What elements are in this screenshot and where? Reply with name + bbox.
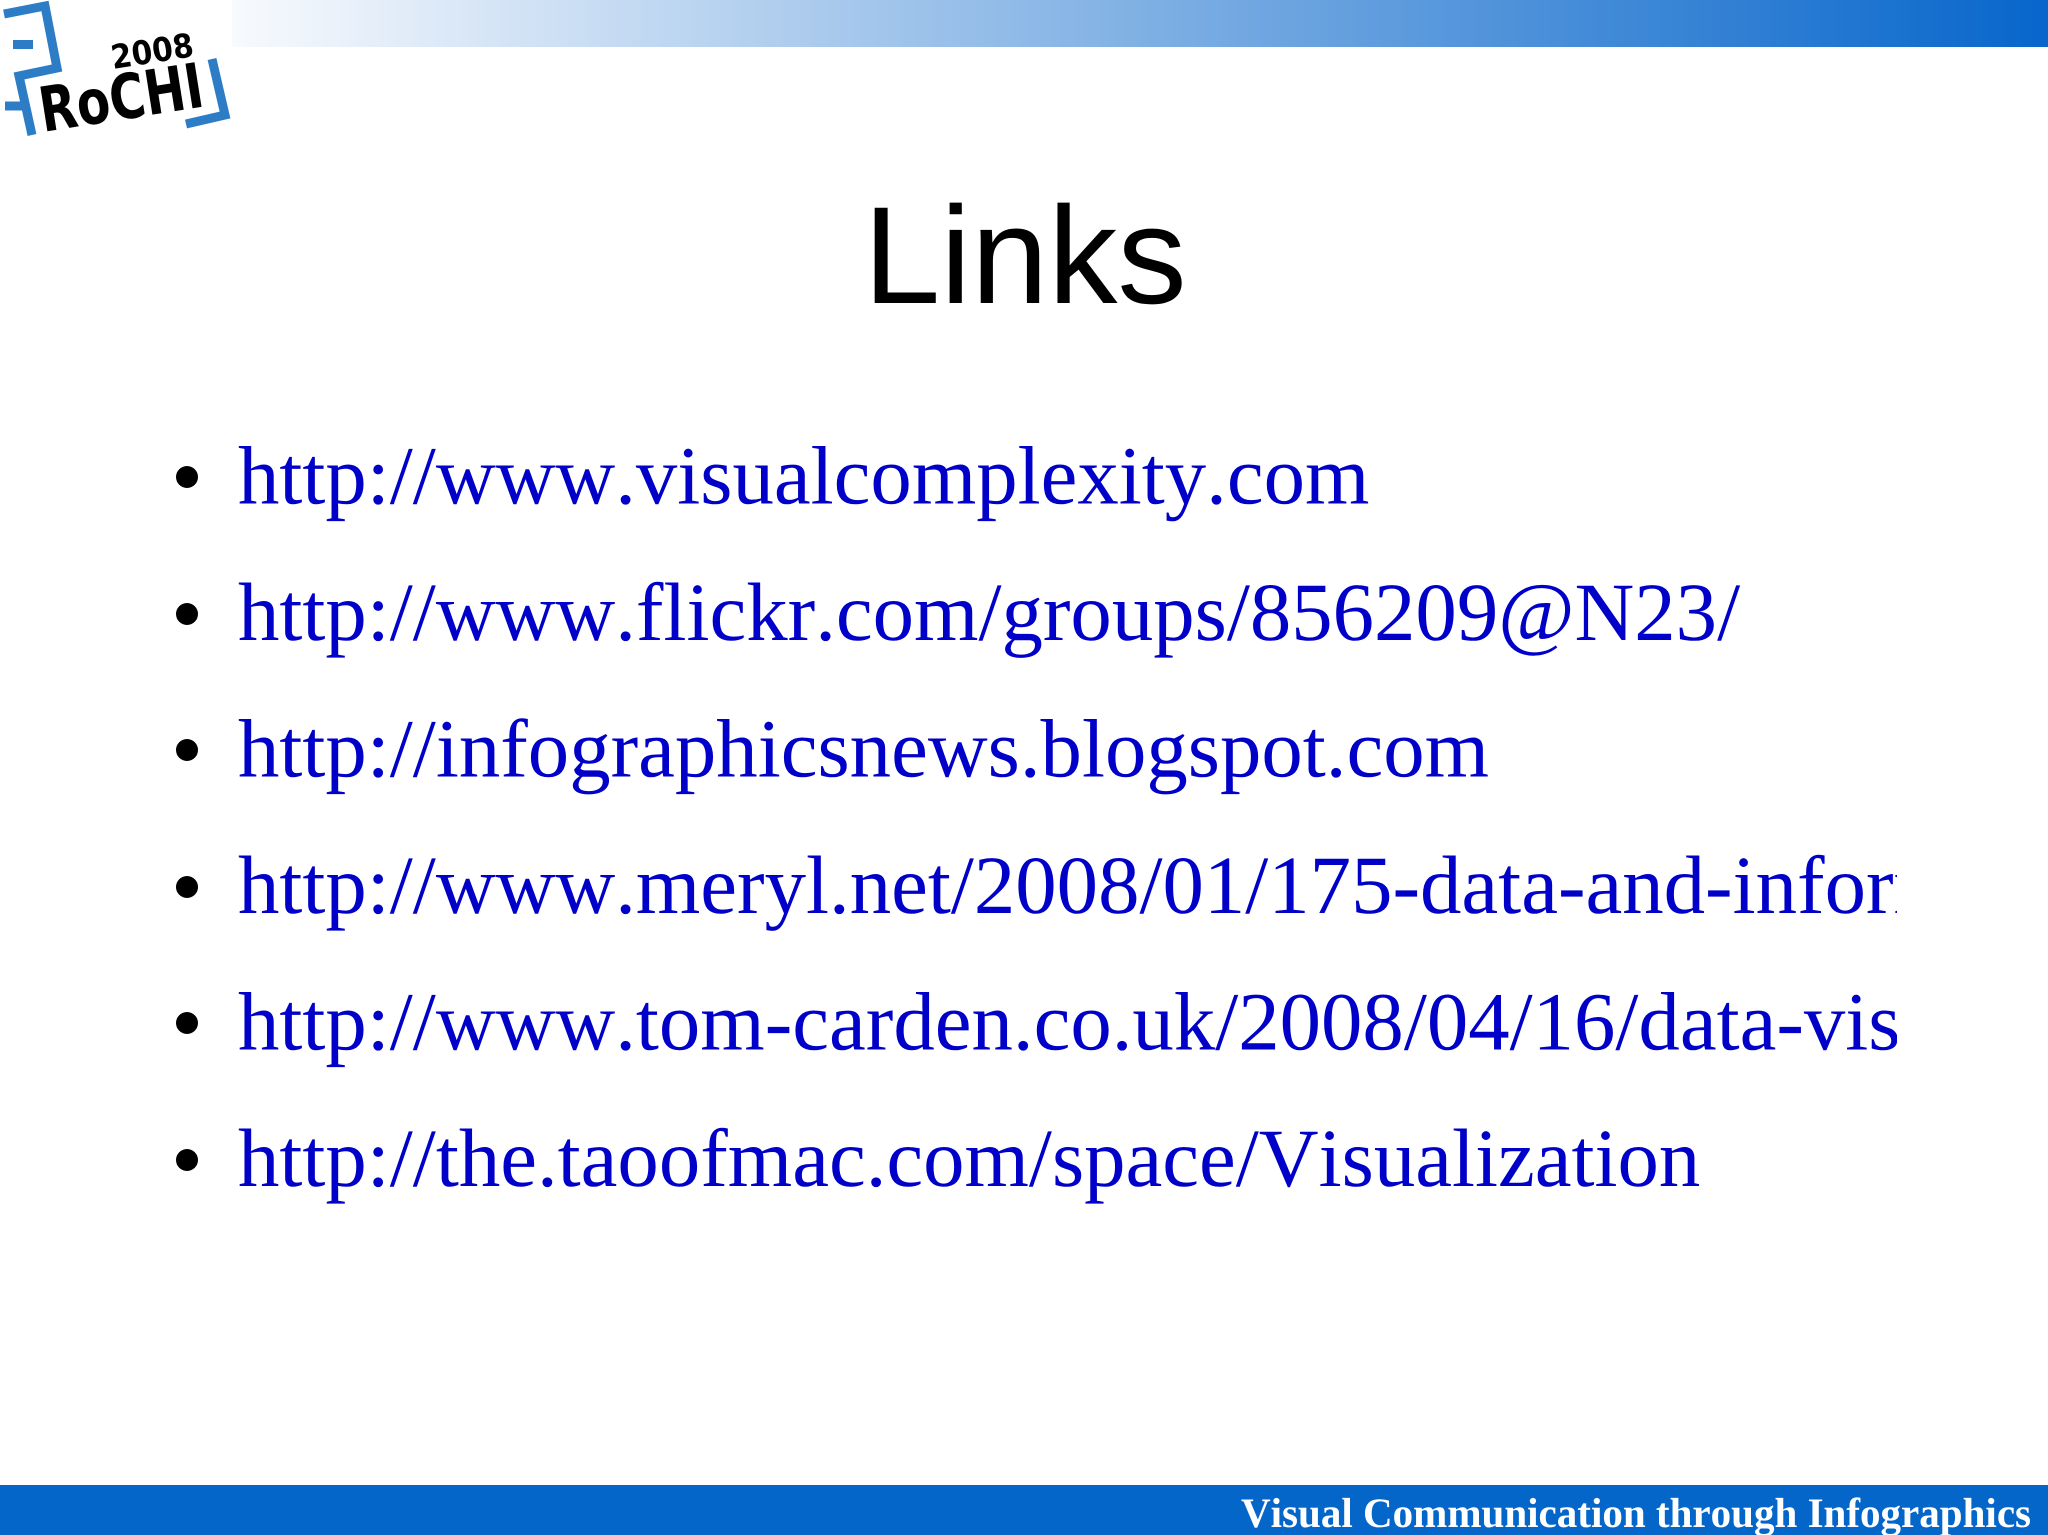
link 6: http://the.taoofmac.com/space/Visualization (238, 1112, 1700, 1204)
top gradient bar (232, 0, 2048, 47)
footer bar (0, 1485, 2048, 1535)
logo: RoCHI 2008: RoCHI (34, 49, 208, 147)
link 3: http://infographicsnews.blogspot.com (238, 702, 1489, 794)
title: Links (863, 179, 1187, 333)
link 1: http://www.visualcomplexity.com (238, 430, 1369, 522)
link list (176, 446, 1897, 1204)
link 2: http://www.flickr.com/groups/856209@N23/ (238, 566, 1740, 658)
bullet list markers (176, 466, 198, 1171)
logo: RoCHI 2008 (4, 6, 225, 147)
logo: RoCHI 2008: 2008 (108, 25, 196, 77)
